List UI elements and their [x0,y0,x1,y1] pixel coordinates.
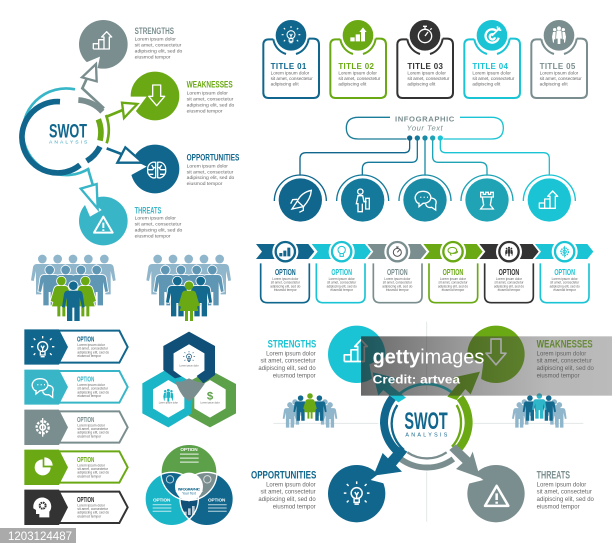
SWOT title [49,121,88,145]
option box 6: eiusmod tempor [553,288,576,292]
circle: opportunities [123,145,179,193]
text: weaknesses: WEAKNESSES [187,80,233,90]
small people left [283,393,337,428]
text: opportunities: sit amet, consectetur [187,169,234,175]
option box 4: adipiscing elit, sed do [438,284,468,288]
option tag 2: adipiscing elit, sed do [77,390,109,394]
circle: weaknesses [125,72,179,120]
hexagon cluster: Lorem ipsum dolor [200,402,220,405]
card 05 [531,20,587,98]
option tag 5 [24,490,128,525]
card 02 [330,20,386,98]
text: opportunities: adipiscing elit, sed do [258,497,316,503]
node: rook [461,175,513,222]
divider lines [273,322,583,522]
option box 5: eiusmod tempor [498,288,520,292]
swot title [404,408,448,438]
option tag 4: OPTION [77,455,94,464]
watermark overlay [361,336,612,396]
text: strengths: eiusmod tempor [135,54,171,60]
swot title: SWOT [404,408,448,435]
option box 6 [540,263,589,303]
option box 5: adipiscing elit, sed do [494,284,524,288]
card 04: adipiscing elit [472,82,501,87]
text: opportunities: Lorem ipsum dolor [266,482,316,488]
threats circle [463,465,525,522]
card 05: adipiscing elit [540,82,568,87]
hexagon cluster [142,332,236,427]
text: opportunities: OPPORTUNITIES [187,152,239,162]
option box 2: Lorem ipsum dolor [329,277,355,281]
option tag 4 [24,450,128,485]
card 05: Lorem ipsum dolor [540,71,579,76]
option box 6: adipiscing elit, sed do [550,284,580,288]
arrows [373,372,480,478]
circle: strengths [79,20,128,80]
option tag 4: eiusmod tempor [77,474,102,478]
option tag 5: OPTION [77,495,94,504]
text: strengths: STRENGTHS [135,26,174,36]
central rings [22,88,109,175]
SWOT title: ANALYSIS [49,139,88,145]
text: opportunities: OPPORTUNITIES [251,469,317,481]
header frame: INFOGRAPHIC [395,115,455,124]
text: strengths: sit amet, consectetur [135,43,182,49]
text: opportunities [251,469,317,510]
card 01: TITLE 01 [271,62,307,71]
text: threats: eiusmod tempor [537,504,580,510]
text: weaknesses: adipiscing elit, sed do [187,102,235,108]
option box 3: sit amet, consectetur [383,281,412,285]
people group 2 [146,255,231,321]
image id tag [0,528,76,543]
option box 2: adipiscing elit, sed do [327,284,357,288]
text: strengths: adipiscing elit, sed do [135,48,183,54]
option box 4 [429,263,478,303]
option box 3: eiusmod tempor [386,288,409,292]
hexagon cluster: Lorem ipsum dolor [179,364,199,367]
text: threats [135,205,183,239]
venn diagram: OPTION [153,497,171,502]
text: strengths: STRENGTHS [268,339,317,351]
venn diagram: INFOGRAPHIC [178,487,200,491]
option box 2 [316,263,365,303]
option arrow 5 [479,239,539,265]
text: opportunities: adipiscing elit, sed do [187,175,235,181]
text: weaknesses: eiusmod tempor [187,108,223,114]
small people right [512,393,567,428]
text: strengths: sit amet, consectetur [260,359,316,365]
card 02: TITLE 02 [338,62,375,71]
text: threats: THREATS [135,205,161,215]
infographic tree [256,115,593,303]
option tag 4: adipiscing elit, sed do [77,471,109,475]
option arrow 2 [312,239,371,265]
option arrow 6 [535,239,593,265]
text: threats: eiusmod tempor [135,233,171,239]
option tag 2 [24,370,128,405]
text: threats [537,469,595,510]
option tag 1 [24,329,128,365]
option tag 2: eiusmod tempor [77,394,102,398]
node: bars [523,175,575,222]
node: man with gear [337,175,389,222]
text: threats: Lorem ipsum dolor [537,482,586,488]
weaknesses circle [460,326,525,392]
option box 5: OPTION [499,267,519,277]
card 04: sit amet, consectetur [472,76,515,81]
option box 5 [485,263,533,303]
venn diagram: Your Text [182,491,196,495]
option tag 1: eiusmod tempor [77,354,102,358]
option arrow 1 [256,239,314,265]
card 05: TITLE 05 [540,62,576,71]
option box 5: Lorem ipsum dolor [496,277,522,281]
option tag 3: OPTION [77,415,94,424]
venn diagram: OPTION [208,497,226,502]
text: strengths: Lorem ipsum dolor [266,351,316,357]
SWOT diagram top left [22,20,239,245]
text: weaknesses: sit amet, consectetur [537,359,592,365]
connector 2 [362,135,420,176]
text: strengths: Lorem ipsum dolor [135,37,176,43]
lower right SWOT [251,322,612,522]
option tag 3 [24,410,128,445]
header frame: Your Text [407,124,444,133]
option box 2: eiusmod tempor [330,288,353,292]
text: strengths [258,339,317,379]
text: weaknesses: Lorem ipsum dolor [187,91,228,97]
text: weaknesses: eiusmod tempor [537,373,580,379]
card 02: sit amet, consectetur [338,76,381,81]
text: opportunities: eiusmod tempor [187,181,223,187]
center rings [384,384,469,468]
text: threats: THREATS [537,469,570,481]
title cards row [263,20,587,98]
text: threats: sit amet, consectetur [135,222,182,228]
option box 6: sit amet, consectetur [550,281,579,285]
people group 1 [31,255,116,321]
card 05: sit amet, consectetur [540,76,582,81]
option tag 5: adipiscing elit, sed do [77,511,109,515]
option arrow 3 [367,239,427,265]
option box 3 [373,263,422,303]
text: strengths: eiusmod tempor [273,373,316,379]
header frame [346,115,503,139]
text: opportunities [187,152,239,187]
option tag 2: OPTION [77,375,94,384]
option tag 4: Lorem ipsum dolor [77,463,106,467]
option box 3: OPTION [387,267,408,277]
text: strengths [135,26,183,60]
text: threats: Lorem ipsum dolor [135,216,176,222]
option box 2: OPTION [331,267,352,277]
card 01: sit amet, consectetur [271,76,313,81]
option tag 3: eiusmod tempor [77,434,102,438]
card 04 [464,20,520,98]
option box 4: eiusmod tempor [442,288,464,292]
venn diagram: OPTION [180,447,198,452]
option box 3: Lorem ipsum dolor [384,277,410,281]
option box 5: sit amet, consectetur [494,281,524,285]
card 04: Lorem ipsum dolor [472,71,511,76]
option box 1: OPTION [275,267,296,277]
option box 1: adipiscing elit, sed do [270,284,301,288]
card 03: sit amet, consectetur [407,76,450,81]
text: weaknesses: Lorem ipsum dolor [537,351,586,357]
arrow: strengths [82,64,104,108]
lower left block [24,255,236,526]
text: opportunities: Lorem ipsum dolor [187,163,228,169]
card 03: adipiscing elit [407,82,436,87]
card 03 [397,20,453,98]
text: weaknesses: sit amet, consectetur [187,97,234,103]
option box 4: Lorem ipsum dolor [440,277,466,281]
text: weaknesses [537,339,595,379]
SWOT title: SWOT [49,121,87,142]
text: weaknesses [187,80,235,114]
option arrow 4 [423,239,483,265]
option tag 1: Lorem ipsum dolor [77,343,106,347]
option tag 5: eiusmod tempor [77,514,102,518]
circle: threats [79,193,128,245]
card 01 [263,20,319,98]
arrow: opportunities [107,147,143,163]
text: opportunities: eiusmod tempor [273,504,316,510]
option box 4: OPTION [443,267,463,277]
connector 5 [438,135,549,176]
card 01: adipiscing elit [271,82,299,87]
option tag 1: adipiscing elit, sed do [77,350,109,354]
text: threats: sit amet, consectetur [537,490,592,496]
card 03: TITLE 03 [407,62,444,71]
node: rocket [274,175,326,222]
opportunities circle [328,465,390,522]
connector 4 [430,135,487,176]
option box 2: sit amet, consectetur [327,281,356,285]
strengths circle [328,326,393,392]
option tag 3: Lorem ipsum dolor [77,423,106,427]
venn diagram [145,444,233,526]
watermark overlay: gettyimages [373,347,484,369]
connector 3 [422,135,428,176]
card 01: Lorem ipsum dolor [271,71,310,76]
option tag 1: OPTION [77,335,94,344]
card 02: Lorem ipsum dolor [338,71,377,76]
option box 6: Lorem ipsum dolor [552,277,578,281]
option box 1 [261,263,309,303]
card 04: TITLE 04 [472,62,509,71]
option box 6: OPTION [554,267,575,277]
text: strengths: adipiscing elit, sed do [258,366,316,372]
connector 1 [300,135,412,176]
option tag 3: adipiscing elit, sed do [77,431,109,435]
watermark overlay: Credit: artvea [373,372,460,386]
option tag 2: sit amet, consectetur [77,387,109,391]
node: chat [399,175,451,222]
option box 3: adipiscing elit, sed do [382,284,413,288]
option box 4: sit amet, consectetur [438,281,468,285]
arrow: weaknesses [107,103,137,118]
arrow: threats [81,170,98,209]
option tag 2: Lorem ipsum dolor [77,383,106,387]
option box 1: Lorem ipsum dolor [272,277,298,281]
card 03: Lorem ipsum dolor [407,71,446,76]
option tag 4: sit amet, consectetur [77,467,109,471]
text: threats: adipiscing elit, sed do [135,227,183,233]
card 02: adipiscing elit [338,82,367,87]
swot title: ANALYSIS [405,432,448,438]
image id tag: 1203124487 [8,531,72,543]
option tag 3: sit amet, consectetur [77,427,109,431]
hexagon cluster: $ [207,390,214,402]
option box 1: eiusmod tempor [274,288,297,292]
text: threats: adipiscing elit, sed do [537,497,595,503]
option tag 5: Lorem ipsum dolor [77,503,106,507]
option box 1: sit amet, consectetur [271,281,300,285]
text: opportunities: sit amet, consectetur [260,490,316,496]
hexagon cluster: Lorem ipsum dolor [159,402,178,405]
option tag 1: sit amet, consectetur [77,347,109,351]
text: weaknesses: adipiscing elit, sed do [537,366,595,372]
option tag 5: sit amet, consectetur [77,507,109,511]
